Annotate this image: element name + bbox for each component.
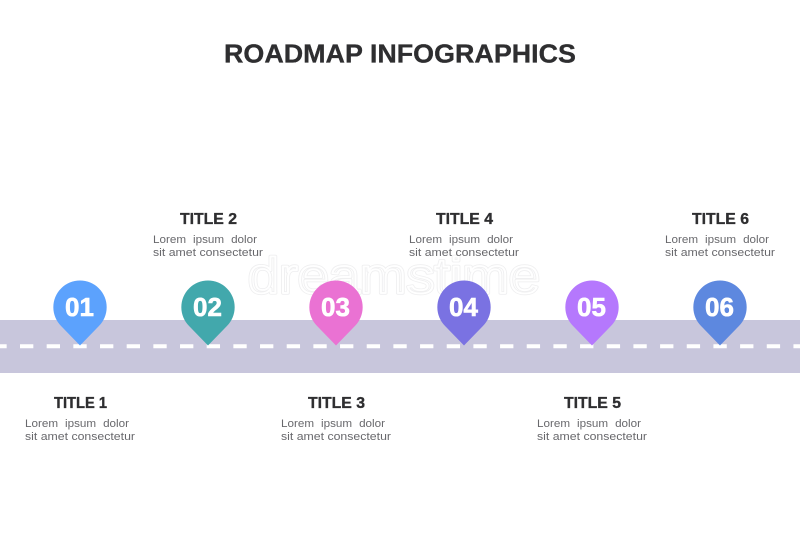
text block: title 2 — [153, 211, 263, 259]
text block: title 5 — [537, 395, 647, 443]
watermark: dreamstime — [248, 248, 540, 304]
text block: title 6: TITLE 6 — [692, 211, 749, 228]
text block: title 6 — [665, 211, 775, 259]
text block: title 1: Lorem ipsum dolor — [25, 418, 129, 430]
text block: title 6: Lorem ipsum dolor — [665, 234, 769, 246]
pin 06 — [693, 281, 747, 346]
pin 01: 01 — [65, 292, 94, 322]
text block: title 3 — [281, 395, 391, 443]
road — [0, 320, 800, 373]
text block: title 5: Lorem ipsum dolor — [537, 418, 641, 430]
text block: title 6: sit amet consectetur — [665, 247, 775, 259]
text block: title 3: TITLE 3 — [308, 395, 365, 412]
text block: title 5: sit amet consectetur — [537, 431, 647, 443]
text block: title 2: Lorem ipsum dolor — [153, 234, 257, 246]
text block: title 1 — [25, 395, 135, 443]
text block: title 3: sit amet consectetur — [281, 431, 391, 443]
pin 02 — [181, 281, 235, 346]
pin 03 — [309, 281, 363, 346]
pin 03: 03 — [321, 292, 350, 322]
pin 05 — [565, 281, 619, 346]
pin 02: 02 — [193, 292, 222, 322]
text block: title 4: Lorem ipsum dolor — [409, 234, 513, 246]
title: ROADMAP INFOGRAPHICS — [224, 40, 576, 68]
pin 01 — [53, 281, 107, 346]
text block: title 4: sit amet consectetur — [409, 247, 519, 259]
text block: title 4: TITLE 4 — [436, 211, 493, 228]
text block: title 4 — [409, 211, 519, 259]
pin 04: 04 — [449, 292, 478, 322]
pin 05: 05 — [577, 292, 606, 322]
text block: title 1: sit amet consectetur — [25, 431, 135, 443]
text block: title 5: TITLE 5 — [564, 395, 621, 412]
text block: title 2: sit amet consectetur — [153, 247, 263, 259]
text block: title 1: TITLE 1 — [54, 395, 107, 412]
pin 04 — [437, 281, 491, 346]
pin 06: 06 — [705, 292, 734, 322]
text block: title 2: TITLE 2 — [180, 211, 237, 228]
text block: title 3: Lorem ipsum dolor — [281, 418, 385, 430]
watermark: dreamstime — [248, 248, 540, 304]
